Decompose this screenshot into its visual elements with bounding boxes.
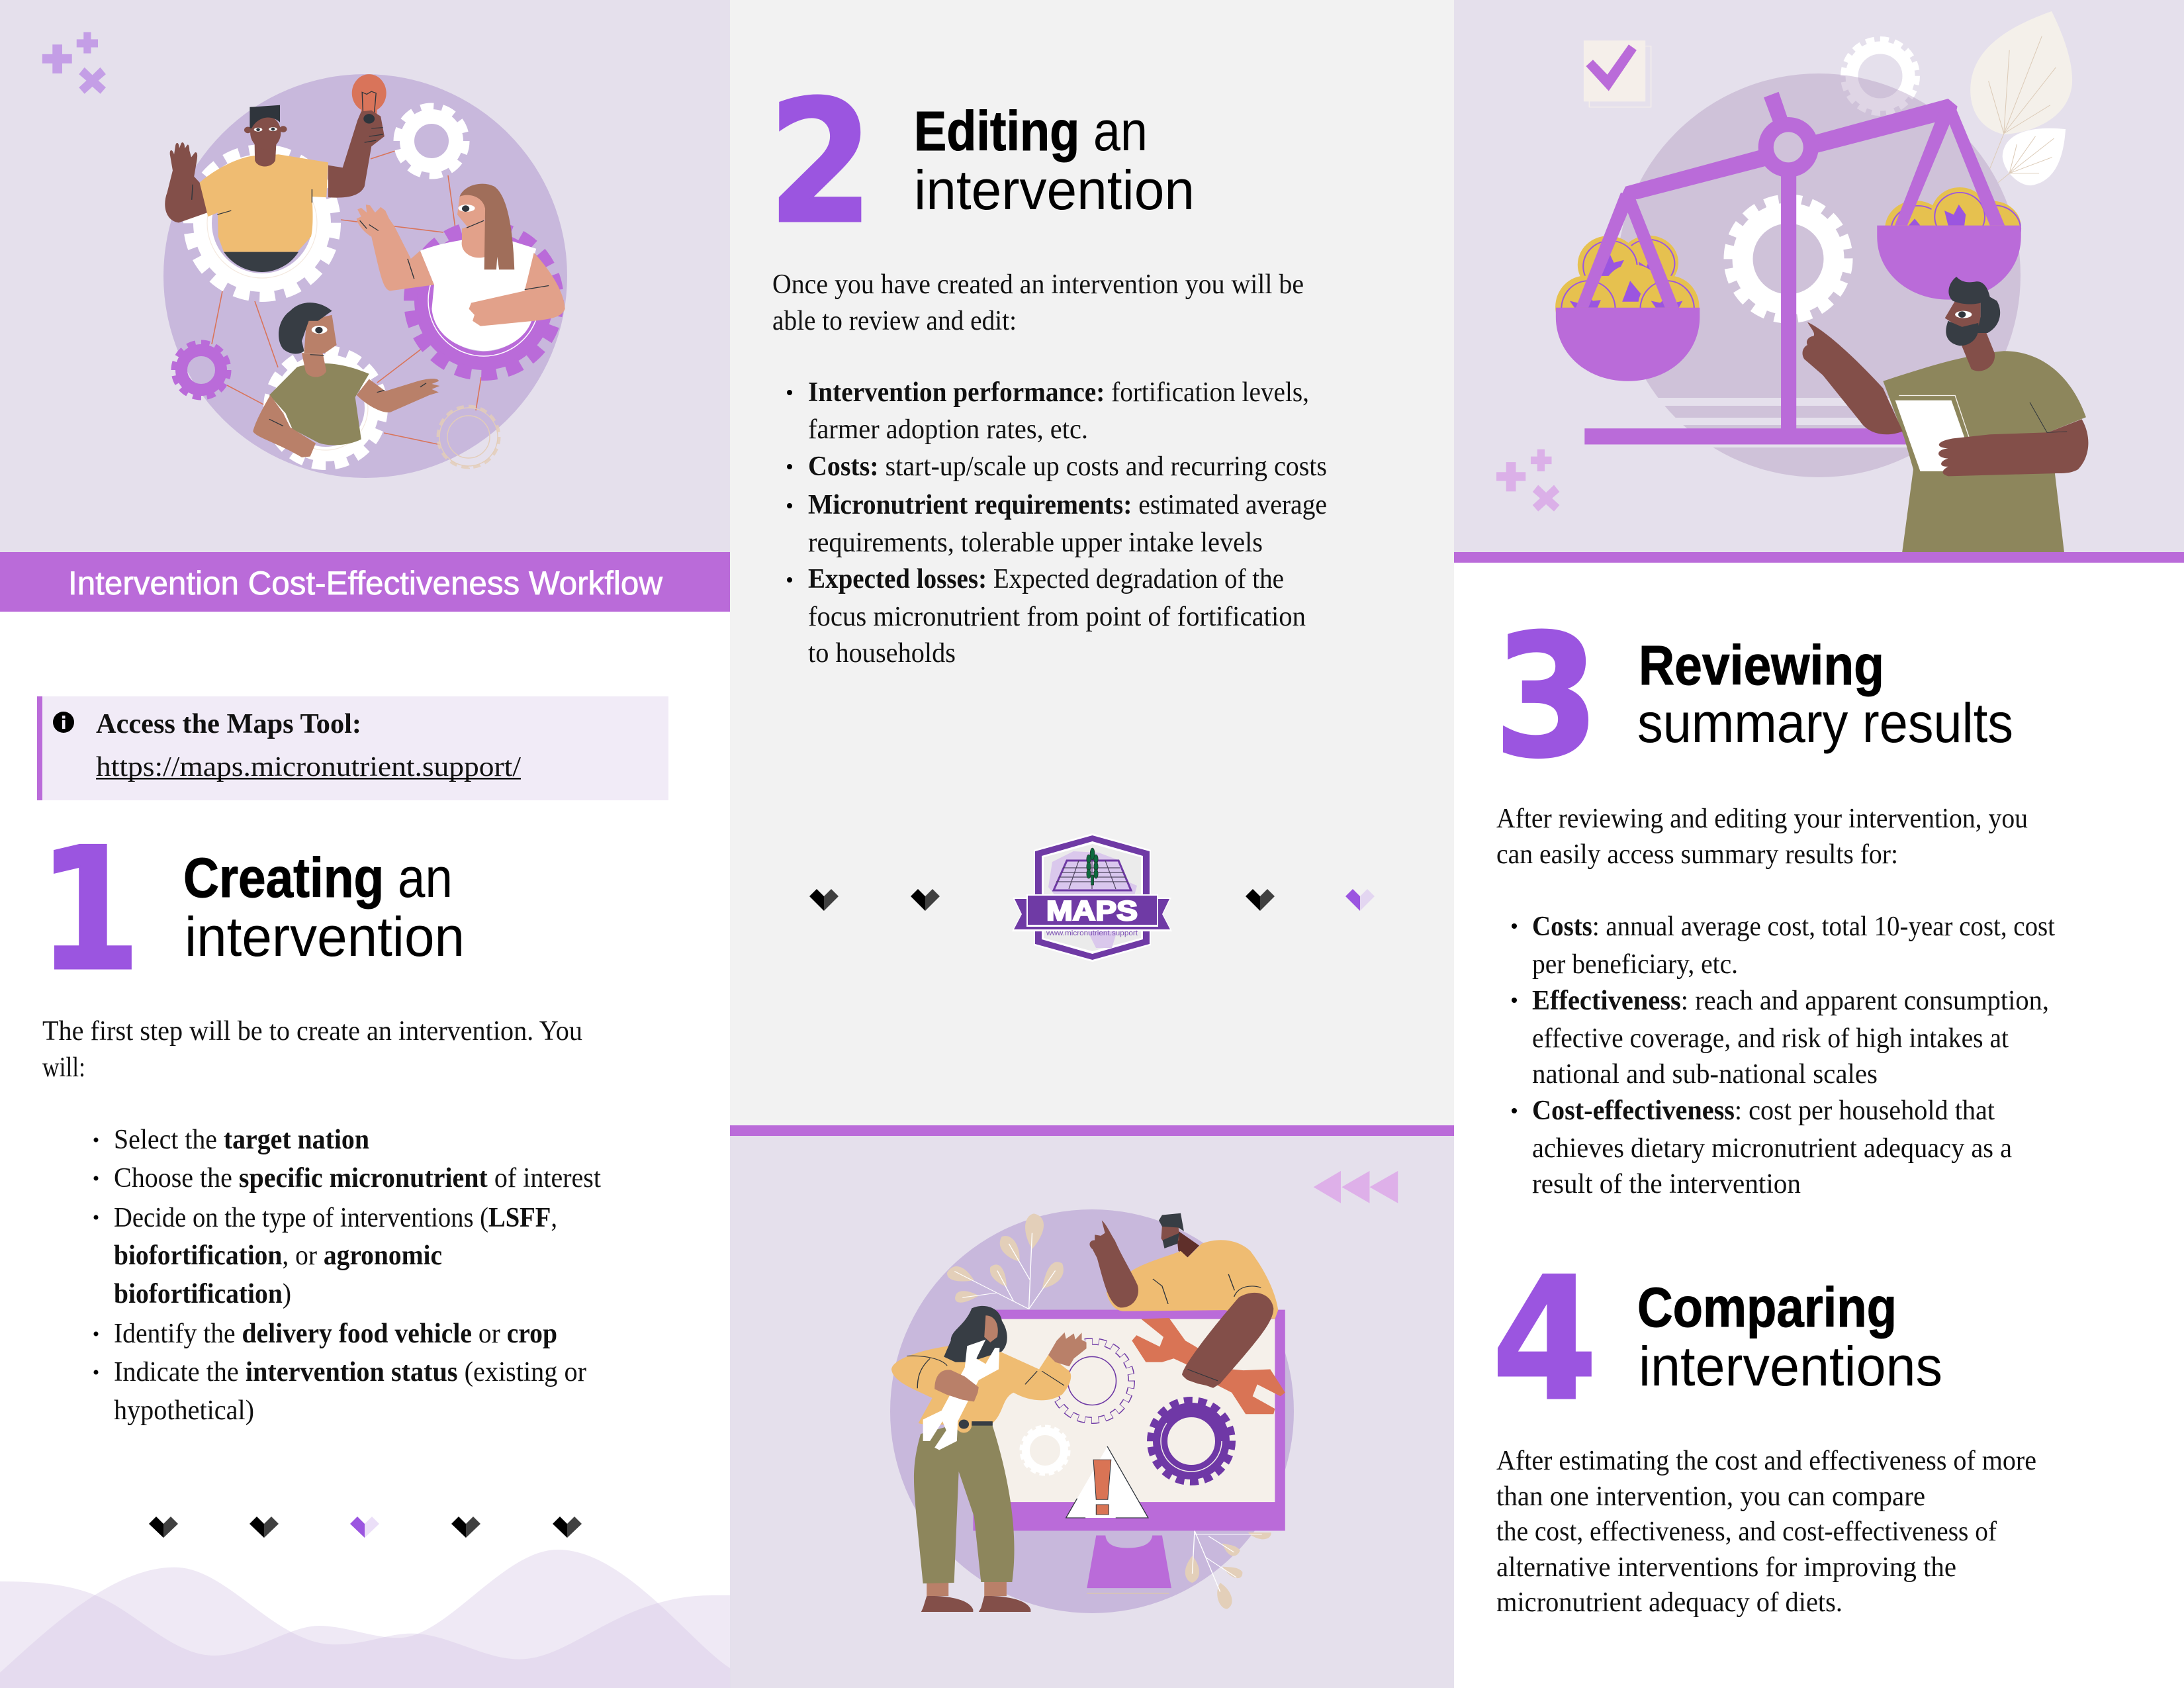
icon: rewind triangles xyxy=(1314,1171,1398,1203)
heading: step 2 xyxy=(914,100,1195,221)
logo: MAPS badge: MAPS xyxy=(1046,895,1138,926)
panel: middle column illustration background xyxy=(730,1125,1454,1688)
connecting lines xyxy=(212,150,481,445)
background stripes xyxy=(1615,398,1985,447)
text block: step 4: alternative interventions for improving the xyxy=(1496,1552,1956,1583)
text block: step 3 intro: After reviewing and editing your intervention, you xyxy=(1496,804,2028,834)
illustration: team with gears xyxy=(42,32,567,478)
list: step 3 bullets: national and sub-national scales xyxy=(1532,1059,1878,1090)
list: step 3 bullets: result of the intervention xyxy=(1532,1169,1801,1199)
title: Intervention Cost-Effectiveness Workflow xyxy=(68,565,663,602)
text block: step 1 intro: The first step will be to create an intervention. You xyxy=(42,1016,582,1047)
list: step 2 bullets: requirements, tolerable upper intake levels xyxy=(808,528,1263,558)
list: step 1 bullets: biofortification) xyxy=(114,1279,291,1309)
plant: top xyxy=(947,1213,1064,1309)
africa map shape xyxy=(1048,851,1137,948)
gear: top right white xyxy=(398,107,465,175)
list: step 3 bullets: achieves dietary micronutrient adequacy as a xyxy=(1532,1133,2012,1164)
person: boy with dark hair xyxy=(253,303,439,457)
list: step 1 bullets: Select the target nation xyxy=(114,1125,369,1155)
divider bar: middle column xyxy=(730,1125,1454,1136)
divider hearts: left column xyxy=(149,1517,582,1538)
heading: step 4: interventions xyxy=(1639,1335,1942,1397)
text block: step 1 intro xyxy=(42,1016,582,1083)
list: step 3 bullets: Effectiveness: reach and apparent consumption, xyxy=(1532,986,2049,1016)
person: woman with long hair xyxy=(357,184,565,351)
illustration: scale and analyst xyxy=(1496,11,2088,552)
panel: right column illustration background xyxy=(1454,0,2184,552)
callout: access the maps tool: Access the Maps Tool: xyxy=(96,709,361,739)
gear: white centre xyxy=(1729,199,1848,318)
heading: step 4 xyxy=(1637,1276,1942,1397)
callout: access the maps tool xyxy=(37,696,668,800)
list: step 3 bullets: effective coverage, and risk of high intakes at xyxy=(1532,1023,2009,1054)
computer monitor xyxy=(973,1310,1285,1594)
list: step 2 bullets: farmer adoption rates, etc. xyxy=(808,414,1088,445)
wheat xyxy=(1087,848,1098,885)
heading: step 3: summary results xyxy=(1637,692,2013,754)
background circle xyxy=(163,74,567,478)
list: step 2 bullets xyxy=(787,377,1327,669)
step number 4: 4 xyxy=(1492,1241,1598,1438)
list: step 2 bullets: Intervention performance: fortification levels, xyxy=(808,377,1309,408)
gear: white upper xyxy=(1844,40,1917,113)
field grid xyxy=(1054,861,1131,890)
gear: dark purple xyxy=(1150,1400,1232,1482)
person: bearded man pointing xyxy=(1089,1213,1278,1388)
list: step 3 bullets: per beneficiary, etc. xyxy=(1532,949,1738,980)
warning triangle xyxy=(1066,1446,1148,1518)
gear: white behind boy xyxy=(269,351,383,465)
logo: MAPS badge: www.micronutrient.support xyxy=(1046,929,1138,937)
text block: step 4: the cost, effectiveness, and cost-effectiveness of xyxy=(1496,1517,1997,1547)
icon: plus and cross signs xyxy=(1496,449,1559,512)
plant: bottom xyxy=(1185,1530,1271,1609)
decorative waves: bottom left xyxy=(0,1550,730,1688)
ribbon xyxy=(1012,894,1172,931)
text block: step 2 intro: Once you have created an intervention you will be xyxy=(772,269,1304,300)
coins: left xyxy=(1555,236,1700,338)
list: step 1 bullets: Identify the delivery food vehicle or crop xyxy=(114,1319,557,1349)
list: step 2 bullets: to households xyxy=(808,638,956,669)
list: step 1 bullets xyxy=(94,1125,601,1426)
icon: plus and cross signs xyxy=(42,32,106,94)
step number 3: 3 xyxy=(1494,598,1600,796)
balance scale xyxy=(1556,92,2021,444)
step number 2: 2 xyxy=(768,64,874,261)
gear: beige outline xyxy=(438,406,499,467)
text block: step 4: micronutrient adequacy of diets. xyxy=(1496,1587,1843,1618)
heading: step 4: Comparing xyxy=(1637,1276,1897,1338)
heading: step 2: intervention xyxy=(914,159,1195,221)
icon: checkbox xyxy=(1584,40,1651,107)
text block: step 3 intro xyxy=(1496,804,2028,870)
text block: step 2 intro xyxy=(772,269,1304,336)
list: step 2 bullets: Expected losses: Expected degradation of the xyxy=(808,564,1284,594)
icon: info xyxy=(53,712,74,733)
gear: white behind man xyxy=(189,150,335,296)
person: woman with wrench xyxy=(891,1306,1087,1612)
gear: purple behind woman xyxy=(410,227,557,374)
illustration: repairing a computer xyxy=(890,1171,1398,1613)
list: step 1 bullets: Choose the specific micronutrient of interest xyxy=(114,1163,601,1194)
wrench: white xyxy=(923,1340,999,1450)
heading: step 1 xyxy=(183,847,465,968)
list: step 1 bullets: biofortification, or agronomic xyxy=(114,1241,442,1271)
divider hearts: middle column xyxy=(809,889,1375,911)
list: step 1 bullets: hypothetical) xyxy=(114,1395,254,1426)
coins: right xyxy=(1885,187,2021,257)
list: step 1 bullets: Indicate the intervention status (existing or xyxy=(114,1357,586,1387)
text block: step 4: After estimating the cost and effectiveness of more xyxy=(1496,1446,2036,1476)
leaves xyxy=(1970,11,2072,185)
text block: step 4 xyxy=(1496,1446,2036,1618)
text block: step 3 intro: can easily access summary results for: xyxy=(1496,839,1898,870)
list: step 2 bullets: focus micronutrient from point of fortification xyxy=(808,602,1306,632)
step number 1: 1 xyxy=(38,812,141,1009)
logo: MAPS badge xyxy=(1012,833,1172,962)
callout: access the maps tool: https://maps.micronutrient.support/ xyxy=(96,752,521,782)
title banner xyxy=(0,552,730,612)
background circle xyxy=(890,1209,1294,1613)
list: step 3 bullets xyxy=(1512,912,2055,1199)
heading: step 3: Reviewing xyxy=(1639,634,1884,696)
list: step 2 bullets: Costs: start-up/scale up costs and recurring costs xyxy=(808,451,1327,482)
people xyxy=(165,74,565,457)
panel: left column illustration background xyxy=(0,0,730,552)
text block: step 4: than one intervention, you can compare xyxy=(1496,1481,1925,1512)
panel: middle column text background xyxy=(730,0,1454,1125)
wrench: orange xyxy=(1132,1318,1285,1414)
list: step 2 bullets: Micronutrient requirements: estimated average xyxy=(808,490,1327,520)
list: step 3 bullets: Cost-effectiveness: cost per household that xyxy=(1532,1096,1995,1126)
text block: step 2 intro: able to review and edit: xyxy=(772,306,1017,336)
gear: white xyxy=(1022,1427,1068,1474)
heading: step 3 xyxy=(1637,634,2013,754)
list: step 3 bullets: Costs: annual average cost, total 10-year cost, cost xyxy=(1532,912,2055,942)
heading: step 1: Creating an xyxy=(183,847,453,909)
person: bearded analyst xyxy=(1803,277,2088,552)
divider bar: right column xyxy=(1454,552,2184,563)
gear: small purple xyxy=(174,343,228,397)
heading: step 1: intervention xyxy=(185,906,465,968)
text block: step 1 intro: will: xyxy=(42,1053,85,1083)
person: man with bulb xyxy=(165,74,387,272)
heading: step 2: Editing an xyxy=(914,100,1148,162)
background circle xyxy=(1617,73,2021,477)
list: step 1 bullets: Decide on the type of interventions (LSFF, xyxy=(114,1203,557,1233)
gear: outline purple xyxy=(1052,1341,1132,1421)
